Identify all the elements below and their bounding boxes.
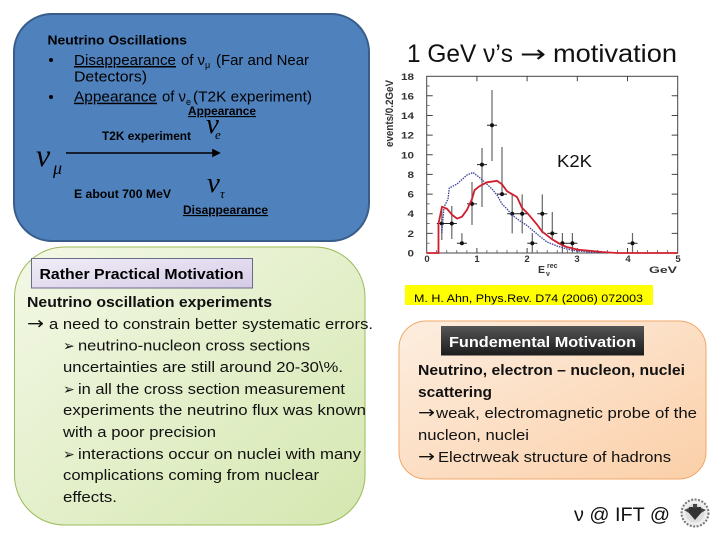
label: energy: E about 700 MeV xyxy=(74,189,171,201)
no-oscillation curve xyxy=(442,172,608,253)
x axis numbers: 4 xyxy=(625,254,631,265)
bullet: appearance: of ν xyxy=(162,89,186,106)
heading: neutrino oscillations: Neutrino Oscillations xyxy=(48,34,187,48)
body text: uncertainties are still around 20-30\%. xyxy=(63,359,343,376)
label: T2K experiment: T2K experiment xyxy=(102,131,191,143)
heading badge: Rather Practical Motivation xyxy=(40,267,244,283)
x axis label: ν xyxy=(546,271,550,278)
y axis numbers: 18 xyxy=(401,72,414,83)
x axis numbers: 5 xyxy=(675,254,681,265)
panel: fundemental motivation xyxy=(399,321,706,479)
body text: in all the cross section measurement xyxy=(78,381,346,398)
body text: ➢ xyxy=(63,382,75,398)
label: disappearance: Disappearance xyxy=(183,205,268,217)
y axis numbers: 0 xyxy=(408,248,414,260)
chart: K2K event spectrum xyxy=(384,72,681,278)
best-fit oscillation curve xyxy=(427,181,678,253)
body text: Electrweak structure of hadrons xyxy=(438,449,671,466)
icon: university seal xyxy=(682,500,708,526)
body text: a need to constrain better systematic errors. xyxy=(49,316,373,333)
body text: scattering xyxy=(418,384,492,401)
y axis numbers: 6 xyxy=(408,190,414,201)
bullet: disappearance: Detectors) xyxy=(74,69,147,86)
y axis label: events/0.2GeV xyxy=(384,79,396,147)
x axis label: GeV xyxy=(649,265,678,276)
symbol: nu tau: τ xyxy=(220,186,226,201)
bullet: disappearance xyxy=(49,52,309,86)
heading badge xyxy=(441,326,644,356)
label: K2K: K2K xyxy=(557,151,592,171)
body text: ➢ xyxy=(63,447,75,463)
symbol: nu e: ν xyxy=(206,108,219,140)
y axis numbers: 12 xyxy=(401,131,414,142)
body text: experiments the neutrino flux was known xyxy=(63,402,366,419)
symbol: nu tau xyxy=(207,167,226,201)
arrow xyxy=(66,150,219,156)
body text: → xyxy=(418,447,435,467)
y axis numbers xyxy=(401,72,415,260)
citation xyxy=(405,285,653,305)
axis frame and ticks xyxy=(427,76,678,253)
x axis label xyxy=(538,263,678,278)
body text: weak, electromagnetic probe of the xyxy=(435,405,697,422)
label: appearance: Appearance xyxy=(188,106,256,118)
y axis numbers: 14 xyxy=(401,111,415,122)
symbol: nu mu: μ xyxy=(52,158,62,178)
data points xyxy=(437,90,638,253)
x axis numbers: 0 xyxy=(424,254,430,265)
title: 1 GeV ν’s xyxy=(407,40,513,68)
symbol: nu mu xyxy=(36,137,62,178)
citation: M. H. Ahn, Phys.Rev. D74 (2006) 072003 xyxy=(414,293,643,305)
heading badge xyxy=(32,258,252,288)
x axis label: rec xyxy=(547,263,558,270)
body text: Neutrino oscillation experiments xyxy=(27,294,272,311)
footer text: ν @ IFT @ xyxy=(574,505,670,526)
y axis numbers: 10 xyxy=(401,150,414,161)
bullet: disappearance: (Far and Near xyxy=(216,52,309,69)
body text: ➢ xyxy=(63,338,75,354)
bullet: disappearance: of ν xyxy=(181,52,205,69)
x axis numbers: 3 xyxy=(574,254,580,265)
y axis numbers: 8 xyxy=(408,170,414,181)
x axis numbers xyxy=(424,254,681,265)
y axis numbers: 16 xyxy=(401,91,414,102)
bullet: appearance: (T2K experiment) xyxy=(193,89,312,106)
title: motivation xyxy=(553,40,677,68)
bullet: appearance xyxy=(49,89,312,107)
x axis numbers: 2 xyxy=(524,254,530,265)
title: → xyxy=(520,40,546,68)
x axis numbers: 1 xyxy=(474,254,480,265)
body text: complications coming from nuclear xyxy=(63,467,319,484)
body text xyxy=(418,362,697,467)
symbol: nu mu: ν xyxy=(36,137,51,173)
bullet: disappearance: μ xyxy=(205,60,210,70)
y axis numbers: 2 xyxy=(408,229,414,240)
body text: effects. xyxy=(63,489,117,506)
body text: interactions occur on nuclei with many xyxy=(78,446,362,463)
symbol: nu tau: ν xyxy=(207,167,220,199)
symbol: nu e: e xyxy=(215,127,221,142)
title xyxy=(407,40,677,68)
body text: Neutrino, electron – nucleon, nuclei xyxy=(418,362,685,379)
panel: neutrino oscillations xyxy=(14,14,369,241)
bullet: appearance: Appearance xyxy=(74,89,157,106)
panel: rather practical motivation xyxy=(14,247,373,525)
bullet: disappearance: Disappearance xyxy=(74,52,176,69)
body text: → xyxy=(27,314,44,334)
bullet: appearance: e xyxy=(186,97,191,107)
body text: with a poor precision xyxy=(62,424,216,441)
x axis label: E xyxy=(538,264,545,276)
body text xyxy=(27,294,373,506)
body text: nucleon, nuclei xyxy=(418,427,529,444)
body text: neutrino-nucleon cross sections xyxy=(78,338,310,354)
heading badge: Fundemental Motivation xyxy=(449,335,636,351)
body text: → xyxy=(418,403,435,423)
y axis numbers: 4 xyxy=(408,209,415,220)
